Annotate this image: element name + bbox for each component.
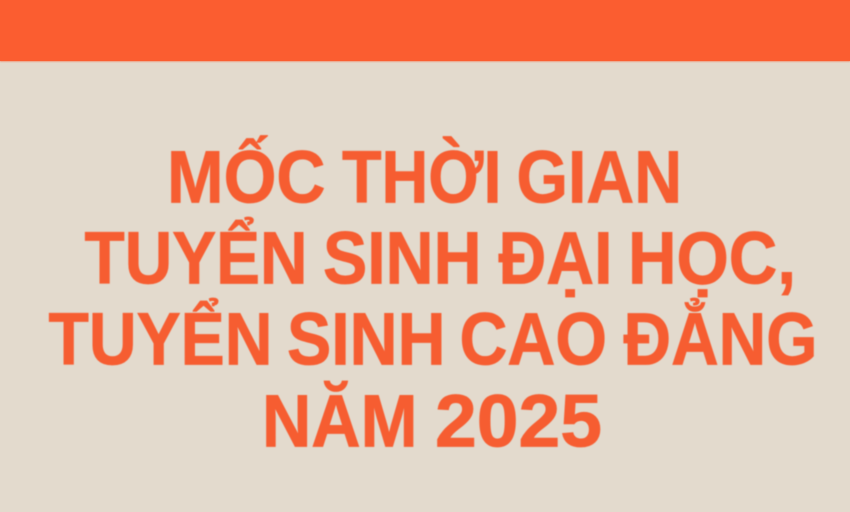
title line 3: CAO bbox=[460, 298, 607, 380]
title line 1 bbox=[167, 136, 682, 218]
top banner bbox=[0, 0, 850, 61]
title line 2: TUYỂN bbox=[84, 216, 308, 300]
title line 2: SINH bbox=[323, 216, 482, 300]
title line 2 bbox=[84, 216, 796, 300]
title line 1: MỐC bbox=[167, 136, 326, 218]
title line 2: ĐẠI bbox=[498, 216, 612, 300]
title line 3: SINH bbox=[287, 298, 446, 380]
title line 4: 2025 bbox=[435, 380, 602, 462]
title line 3: ĐẲNG bbox=[624, 298, 818, 380]
title line 3 bbox=[48, 298, 818, 380]
title line 1: GIAN bbox=[516, 136, 682, 218]
title line 3: TUYỂN bbox=[48, 298, 272, 380]
title line 4 bbox=[262, 380, 602, 462]
title line 4: NĂM bbox=[262, 380, 418, 462]
title line 1: THỜI bbox=[342, 136, 502, 218]
title line 2: HỌC, bbox=[628, 216, 796, 300]
